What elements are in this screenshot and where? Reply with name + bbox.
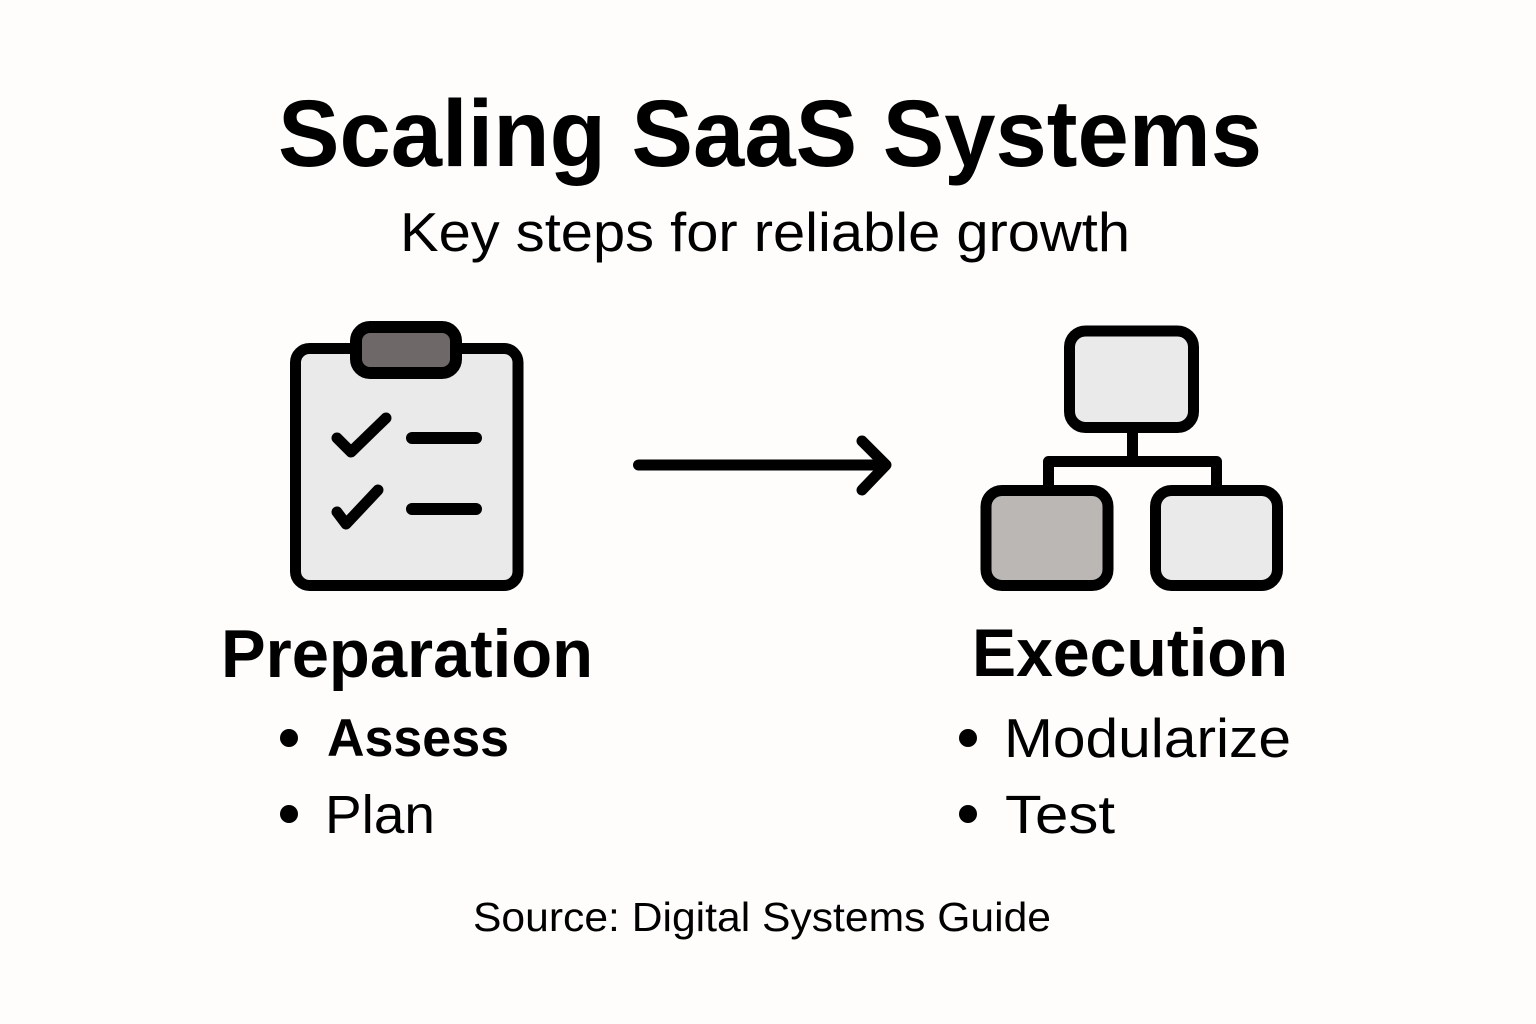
- list: preparation steps: [280, 709, 509, 845]
- icon: clipboard checklist: [296, 327, 518, 586]
- list: execution steps: [959, 707, 1291, 845]
- source note: Source: Digital Systems Guide: [473, 894, 1051, 940]
- heading: Preparation: Preparation: [221, 616, 593, 692]
- list: preparation steps: Assess: [327, 709, 509, 768]
- list: preparation steps: Plan: [325, 785, 435, 845]
- arrow: [638, 441, 886, 490]
- list: execution steps: Test: [1005, 785, 1115, 845]
- icon: hierarchy diagram: [986, 331, 1278, 586]
- heading: Execution: Execution: [972, 615, 1288, 691]
- list: execution steps: Modularize: [1004, 707, 1291, 769]
- subtitle: Key steps for reliable growth: [400, 201, 1130, 263]
- title: Scaling SaaS Systems: [278, 81, 1262, 187]
